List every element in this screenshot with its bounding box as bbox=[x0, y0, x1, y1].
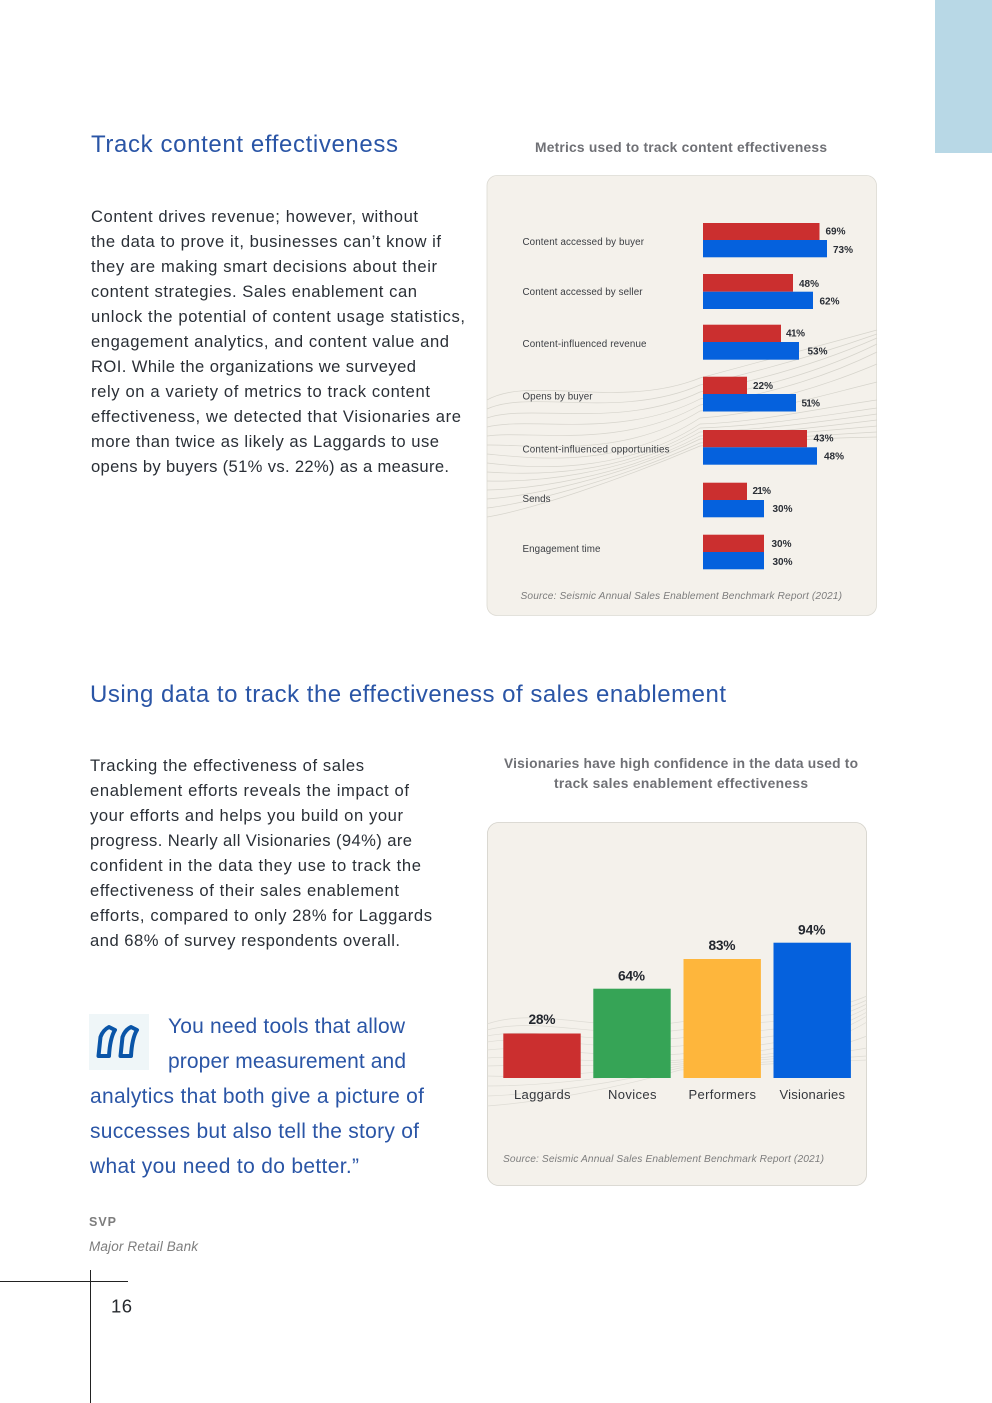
row: content accessed by seller bbox=[522, 274, 840, 309]
bar: performers: 83% bbox=[708, 938, 736, 953]
row: content accessed by seller: 48% bbox=[799, 279, 819, 290]
text block: sales enablement body: enablement efforts reveals the impact of bbox=[90, 781, 409, 800]
chart title: confidence: Visionaries have high confidence in the data used to bbox=[504, 756, 858, 771]
text block: sales enablement body: your efforts and helps you build on your bbox=[90, 806, 403, 825]
bar: laggards: 28% bbox=[528, 1012, 556, 1027]
row: content accessed by buyer bbox=[522, 223, 853, 257]
text block: content effectiveness body: ROI. While the organizations we surveyed bbox=[91, 357, 416, 376]
text block: sales enablement body: confident in the data they use to track the bbox=[90, 856, 421, 875]
bar: visionaries bbox=[774, 922, 851, 1102]
source note: Source: Seismic Annual Sales Enablement Benchmark Report (2021) bbox=[503, 1154, 824, 1165]
callout: quote: proper measurement and bbox=[168, 1050, 406, 1073]
callout: quote: analytics that both give a picture of bbox=[90, 1085, 424, 1108]
row: content accessed by seller: 62% bbox=[820, 296, 840, 308]
quote attribution: SVP bbox=[89, 1215, 116, 1229]
quote attribution: Major Retail Bank bbox=[89, 1239, 199, 1254]
callout: quote bbox=[89, 1015, 424, 1178]
text block: content effectiveness body: unlock the potential of content usage statistics, bbox=[91, 307, 465, 326]
text block: content effectiveness body: rely on a variety of metrics to track content bbox=[91, 382, 430, 401]
panel: metrics bar chart bbox=[487, 176, 877, 616]
heading: track content effectiveness: Track content effectiveness bbox=[91, 131, 398, 158]
bar: visionaries: Visionaries bbox=[780, 1087, 846, 1102]
row: opens by buyer bbox=[522, 377, 820, 412]
text block: sales enablement body: Tracking the effectiveness of sales bbox=[90, 756, 364, 775]
chart title: confidence bbox=[504, 756, 858, 791]
corner accent block bbox=[935, 0, 992, 153]
row: content accessed by seller: Content accessed by seller bbox=[522, 287, 643, 298]
panel background bbox=[487, 176, 876, 616]
text block: content effectiveness body: the data to prove it, businesses can’t know if bbox=[91, 232, 441, 251]
chart title: metrics: Metrics used to track content effectiveness bbox=[535, 140, 827, 155]
row: sends bbox=[522, 483, 793, 517]
source note: Source: Seismic Annual Sales Enablement Benchmark Report (2021) bbox=[520, 591, 842, 602]
text block: content effectiveness body: effectiveness, we detected that Visionaries are bbox=[91, 407, 461, 426]
text block: sales enablement body: effectiveness of their sales enablement bbox=[90, 881, 399, 900]
row: content accessed by buyer: Content accessed by buyer bbox=[522, 237, 645, 248]
quote attribution bbox=[89, 1215, 199, 1254]
page number: 16 bbox=[111, 1296, 132, 1316]
row: engagement time: 30% bbox=[772, 557, 793, 568]
bar: laggards bbox=[503, 1012, 581, 1102]
row: opens by buyer: 22% bbox=[753, 381, 773, 392]
row: engagement time: Engagement time bbox=[522, 544, 601, 555]
row: sends: 30% bbox=[772, 504, 793, 515]
chart title: confidence: track sales enablement effectiveness bbox=[554, 776, 808, 791]
bar: laggards: Laggards bbox=[514, 1087, 571, 1102]
bar: performers bbox=[684, 938, 761, 1102]
row: content-influenced opportunities: 48% bbox=[824, 452, 844, 462]
text block: content effectiveness body: content strategies. Sales enablement can bbox=[91, 282, 417, 301]
text block: content effectiveness body: engagement analytics, and content value and bbox=[91, 332, 449, 351]
text block: content effectiveness body: they are making smart decisions about their bbox=[91, 257, 437, 276]
bar: performers: Performers bbox=[688, 1087, 756, 1102]
page marker lines bbox=[0, 1270, 128, 1403]
panel background bbox=[488, 822, 866, 1186]
row: content accessed by buyer: 69% bbox=[826, 226, 846, 238]
text block: sales enablement body: and 68% of survey respondents overall. bbox=[90, 931, 400, 950]
row: content-influenced revenue: 53% bbox=[808, 346, 828, 358]
text block: content effectiveness body: Content drives revenue; however, without bbox=[91, 207, 418, 226]
row: engagement time bbox=[522, 535, 793, 569]
callout: quote: successes but also tell the story of bbox=[90, 1120, 419, 1143]
callout: quote: You need tools that allow bbox=[168, 1015, 406, 1038]
row: content-influenced opportunities bbox=[522, 430, 844, 465]
row: content-influenced revenue: 41% bbox=[786, 328, 805, 340]
bar: visionaries: 94% bbox=[798, 922, 826, 938]
row: engagement time: 30% bbox=[772, 539, 792, 550]
bar: novices bbox=[593, 968, 671, 1102]
bar: novices: 64% bbox=[618, 968, 645, 984]
wave pattern bbox=[487, 996, 867, 1106]
text block: content effectiveness body: more than twice as likely as Laggards to use bbox=[91, 432, 439, 451]
panel: confidence bar chart bbox=[487, 822, 867, 1186]
row: content-influenced revenue bbox=[522, 325, 828, 360]
row: opens by buyer: 51% bbox=[802, 398, 820, 410]
text block: content effectiveness body: opens by buyers (51% vs. 22%) as a measure. bbox=[91, 457, 449, 476]
wave pattern bbox=[487, 330, 877, 517]
row: content-influenced opportunities: 43% bbox=[814, 434, 834, 444]
row: sends: 21% bbox=[752, 486, 771, 497]
text block: sales enablement body: progress. Nearly all Visionaries (94%) are bbox=[90, 831, 412, 850]
row: sends: Sends bbox=[522, 494, 551, 505]
row: content accessed by buyer: 73% bbox=[833, 245, 853, 256]
row: opens by buyer: Opens by buyer bbox=[522, 392, 593, 402]
text block: sales enablement body bbox=[90, 756, 432, 950]
row: content-influenced opportunities: Content-influenced opportunities bbox=[522, 444, 670, 456]
heading: using data: Using data to track the effectiveness of sales enablement bbox=[90, 681, 726, 708]
bar: novices: Novices bbox=[608, 1087, 657, 1102]
row: content-influenced revenue: Content-influenced revenue bbox=[522, 339, 647, 350]
icon: quotation mark bbox=[89, 1014, 149, 1070]
text block: content effectiveness body bbox=[91, 207, 465, 476]
callout: quote: what you need to do better.” bbox=[89, 1155, 359, 1178]
text block: sales enablement body: efforts, compared to only 28% for Laggards bbox=[90, 906, 432, 925]
